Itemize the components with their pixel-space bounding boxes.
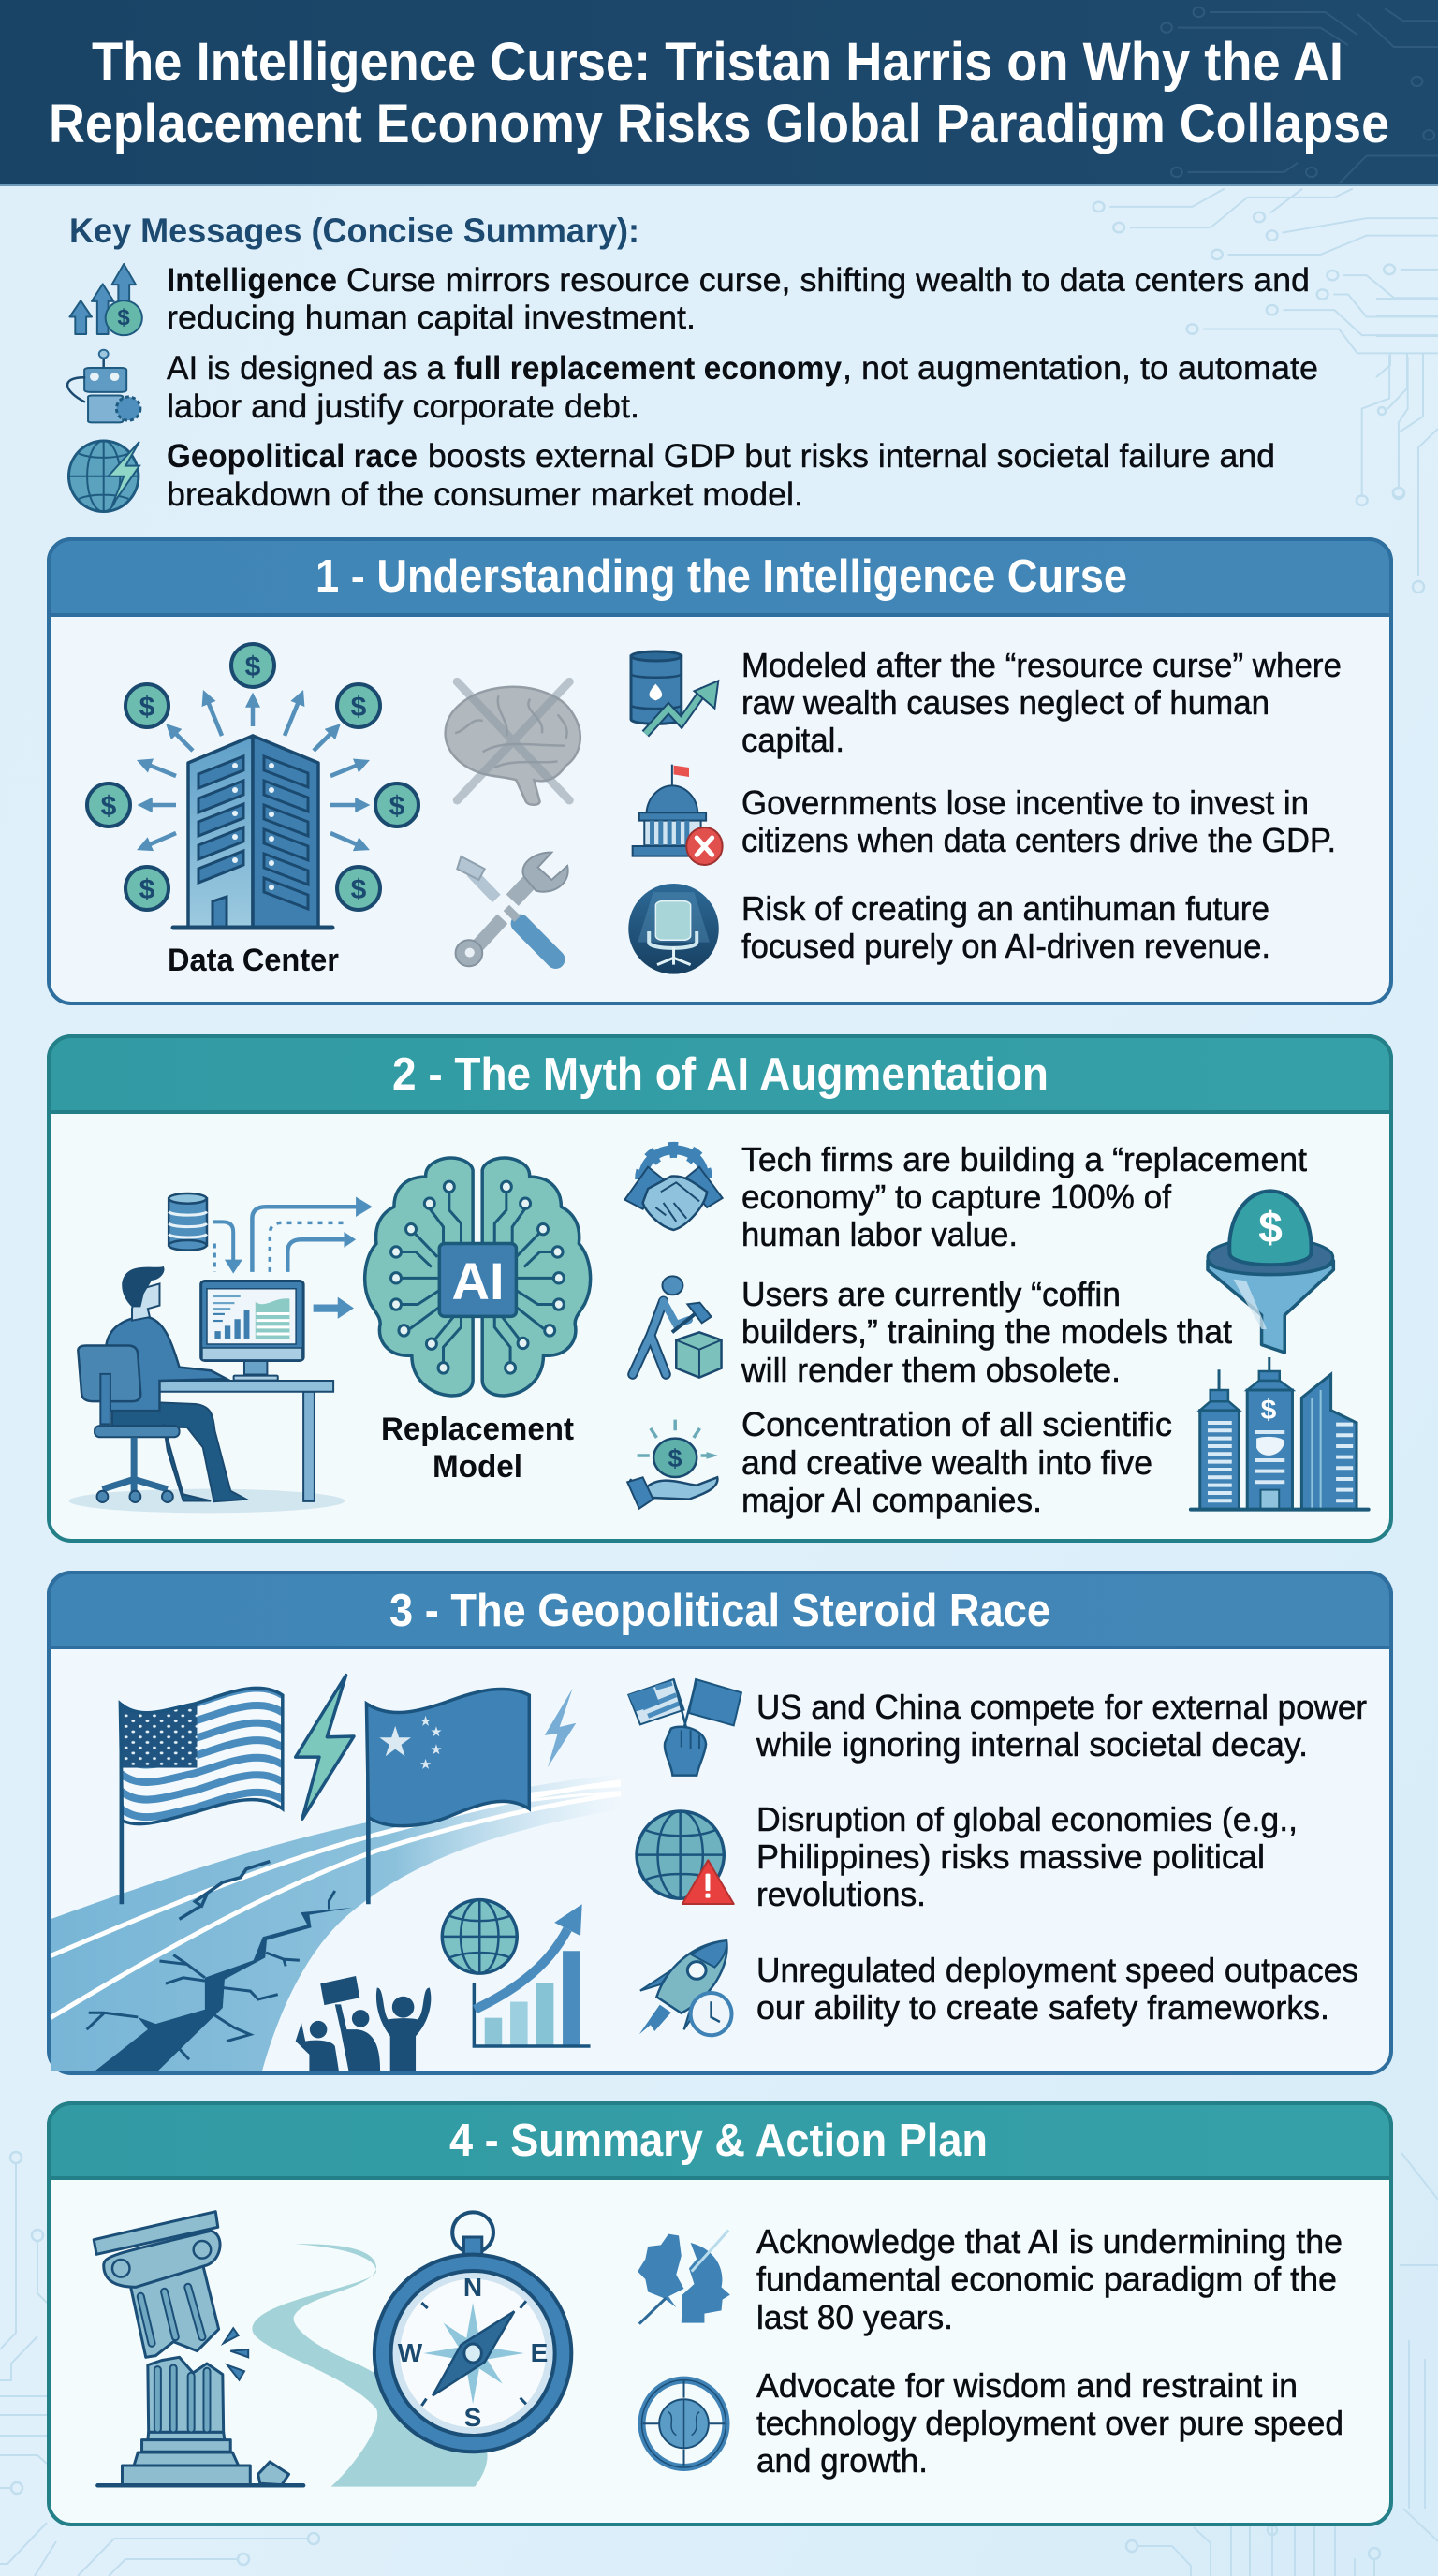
database cylinder — [169, 1193, 207, 1251]
key message 1 text: Curse mirrors resource curse, shifting wealth to data centers and — [346, 262, 1310, 299]
data center label: Data Center — [168, 943, 339, 978]
desk — [157, 1381, 333, 1501]
icon: crossed flags in fist — [628, 1679, 741, 1776]
text block: undermining paradigm: Acknowledge that AI is undermining the — [756, 2222, 1343, 2261]
compass — [374, 2212, 571, 2452]
text block: concentration of wealth: Concentration of all scientific — [741, 1405, 1172, 1443]
text block: wisdom and restraint — [756, 2366, 1343, 2480]
text block: external power: while ignoring internal societal decay. — [756, 1725, 1308, 1764]
text block: resource curse — [741, 646, 1342, 759]
panel 2: the myth of AI augmentation — [49, 1036, 1391, 1541]
icon: crossed-out brain — [446, 681, 580, 805]
key message 1 text: Intelligence — [167, 262, 337, 299]
skyline of AI companies — [1191, 1357, 1369, 1510]
icon: rocket with clock — [639, 1940, 732, 2035]
lightning bolts — [296, 1676, 576, 1819]
text block: replacement economy: human labor value. — [741, 1215, 1018, 1253]
dollar coins: $ — [351, 874, 367, 905]
dollar coins — [87, 644, 418, 910]
compass: N — [463, 2273, 482, 2302]
data flow arrows — [213, 1197, 373, 1319]
text block: concentration of wealth: major AI companies. — [741, 1481, 1042, 1519]
text block: coffin builders: Users are currently “coffin — [741, 1275, 1121, 1313]
text block: deployment speed: our ability to create safety frameworks. — [756, 1988, 1329, 2027]
dollar coins: $ — [245, 651, 261, 682]
text block: resource curse: capital. — [741, 721, 844, 759]
panel 3 header: 3 - The Geopolitical Steroid Race — [389, 1586, 1050, 1636]
globe above growth chart — [442, 1900, 517, 1973]
text block: wisdom and restraint: and growth. — [756, 2441, 928, 2480]
text block: wisdom and restraint: Advocate for wisdom and restraint in — [756, 2366, 1298, 2405]
key message 2 text: AI is designed as a — [167, 350, 446, 387]
text block: antihuman future — [741, 889, 1270, 965]
icon: empty executive chair in spotlight — [628, 884, 719, 974]
icon: oil barrel with rising arrow — [631, 651, 718, 734]
panel 1 header — [49, 539, 1391, 615]
replacement model label: Model — [433, 1449, 522, 1485]
key message 2 text — [167, 350, 1318, 425]
title banner: The Intelligence Curse: Tristan Harris on Why the AI — [92, 32, 1343, 93]
AI brain with circuit traces: AI — [451, 1251, 504, 1310]
icon: person hammering a box — [633, 1276, 722, 1378]
US flag — [116, 1676, 286, 1904]
text block: resource curse: raw wealth causes neglect of human — [741, 683, 1269, 722]
panel 4 header — [49, 2103, 1391, 2178]
text block: coffin builders: will render them obsolete. — [741, 1351, 1121, 1389]
text block: replacement economy: economy” to capture 100% of — [741, 1178, 1172, 1216]
text block: resource curse: Modeled after the “resource curse” where — [741, 646, 1342, 684]
dollar coins: $ — [139, 874, 155, 905]
key message 2 text: , not augmentation, to automate — [843, 350, 1318, 387]
cracked road illustration — [51, 1774, 624, 2071]
winding path — [252, 2244, 488, 2487]
outward arrows — [141, 695, 365, 848]
text block: antihuman future: Risk of creating an antihuman future — [741, 889, 1269, 928]
key message 3 text: boosts external GDP but risks internal societal failure and — [428, 438, 1275, 475]
funnel with dollar coin — [1208, 1191, 1333, 1353]
text block: global disruption: Disruption of global economies (e.g., — [756, 1800, 1298, 1838]
text block: global disruption — [756, 1800, 1298, 1913]
icon: hand holding coin with arrows: $ — [668, 1444, 682, 1472]
text block: deployment speed: Unregulated deployment speed outpaces — [756, 1951, 1358, 1989]
China flag — [366, 1689, 529, 1904]
key message 2 text: full replacement economy — [454, 350, 843, 387]
title banner — [0, 0, 1438, 186]
icon: rising arrows and coin: $ — [117, 305, 130, 330]
dollar coins: $ — [139, 692, 155, 723]
icon: hand holding coin with arrows — [627, 1420, 717, 1509]
icon: handshake with gear — [624, 1149, 723, 1230]
key message 1 text — [167, 262, 1310, 336]
text block: concentration of wealth: and creative wealth into five — [741, 1443, 1152, 1482]
panel 3 header — [49, 1573, 1391, 1647]
data center illustration — [87, 644, 418, 978]
text block: external power: US and China compete for external power — [756, 1688, 1367, 1726]
panel 2 header — [49, 1036, 1391, 1112]
icon: split gear and head — [638, 2231, 730, 2324]
key message 1 text: reducing human capital investment. — [167, 300, 696, 336]
icon: broken tools — [456, 853, 568, 966]
icon: globe with warning triangle — [637, 1811, 734, 1904]
text block: undermining paradigm: fundamental economic paradigm of the — [756, 2260, 1337, 2298]
icon: robot with gear — [67, 350, 140, 422]
text block: antihuman future: focused purely on AI-driven revenue. — [741, 927, 1270, 965]
panel 1 header: 1 - Understanding the Intelligence Curse — [315, 551, 1127, 602]
text block: wisdom and restraint: technology deployment over pure speed — [756, 2404, 1343, 2442]
seated person and chair — [78, 1266, 246, 1502]
panel 3: the geopolitical steroid race — [49, 1573, 1391, 2073]
icon: government building with red x — [633, 765, 723, 865]
panel 4 header: 4 - Summary & Action Plan — [449, 2115, 988, 2166]
text block: replacement economy: Tech firms are building a “replacement — [741, 1140, 1307, 1178]
text block: coffin builders: builders,” training the models that — [741, 1312, 1232, 1351]
panel 4: summary and action plan — [49, 2103, 1391, 2525]
compass: E — [531, 2338, 548, 2367]
skyline of AI companies: $ — [1261, 1395, 1277, 1426]
text block: governments lose incentive: citizens when data centers drive the GDP. — [741, 821, 1336, 859]
text block: deployment speed — [756, 1951, 1358, 2027]
text block: undermining paradigm: last 80 years. — [756, 2298, 953, 2336]
AI brain with circuit traces — [365, 1158, 591, 1485]
funnel with dollar coin: $ — [1258, 1203, 1283, 1251]
illustration: person training AI at a computer — [69, 1193, 373, 1513]
key message 3 text: breakdown of the consumer market model. — [167, 476, 803, 513]
key messages heading: Key Messages (Concise Summary): — [69, 212, 639, 250]
panel 1: understanding the intelligence curse — [49, 539, 1391, 1003]
key message 3 text: Geopolitical race — [167, 438, 418, 475]
text block: undermining paradigm — [756, 2222, 1343, 2336]
icon: brain within compass ring — [642, 2380, 726, 2467]
icon: globe with lightning bolt — [68, 441, 139, 511]
compass: W — [398, 2338, 423, 2367]
icon: rising arrows and coin — [69, 264, 142, 335]
protesters — [296, 1976, 431, 2071]
text block: governments lose incentive — [741, 783, 1336, 859]
text block: global disruption: Philippines) risks massive political — [756, 1837, 1265, 1876]
panel 2 header: 2 - The Myth of AI Augmentation — [392, 1049, 1049, 1100]
key messages section — [67, 212, 1318, 513]
dollar coins: $ — [389, 791, 405, 822]
broken column — [94, 2212, 303, 2485]
text block: governments lose incentive: Governments lose incentive to invest in — [741, 783, 1309, 822]
text block: global disruption: revolutions. — [756, 1875, 926, 1913]
text block: concentration of wealth — [741, 1405, 1172, 1519]
growth bar chart with rising arrow — [474, 1904, 591, 2046]
text block: coffin builders — [741, 1275, 1232, 1389]
replacement model label: Replacement — [381, 1412, 574, 1447]
key message 3 text — [167, 438, 1275, 513]
text block: replacement economy — [741, 1140, 1307, 1253]
computer monitor — [201, 1281, 303, 1381]
key message 2 text: labor and justify corporate debt. — [167, 388, 639, 425]
replacement model label — [381, 1412, 574, 1485]
text block: external power — [756, 1688, 1367, 1764]
dollar coins: $ — [351, 692, 367, 723]
compass: S — [464, 2403, 481, 2432]
dollar coins: $ — [101, 791, 117, 822]
server tower — [173, 736, 332, 928]
